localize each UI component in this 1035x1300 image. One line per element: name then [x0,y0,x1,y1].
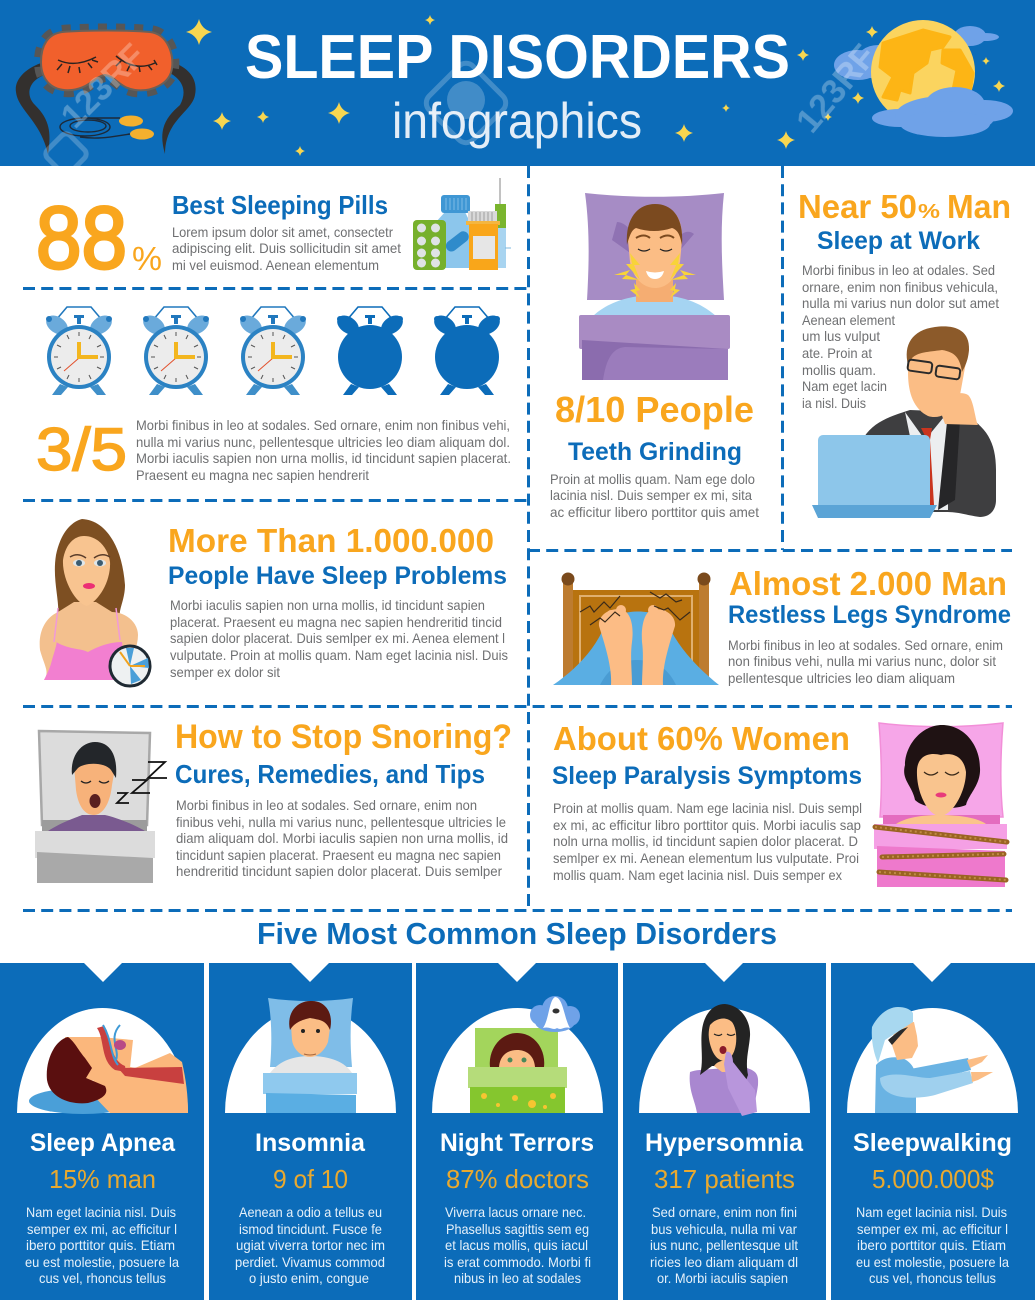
body text: Aenean a odio a tellus eu [239,1204,382,1220]
body text: ia nisl. Duis [802,395,866,411]
body text [802,262,999,411]
icon: alarm clocks [43,307,503,395]
body text: pellentesque ultricies leo diam aliquam [728,670,955,686]
body text: Proin at mollis quam. Nam ege lacinia nisl. Duis sempl [553,800,862,816]
icon: sleepwalker in nightcap [872,1007,993,1113]
body text [650,1204,798,1286]
body text: sapien dolor placerat. Duis semlper ex mi. Aenea element l [170,630,505,646]
body text: semper ex mi, ac efficitur l [27,1221,177,1237]
stat: 9 of 10 [273,1164,348,1194]
body text: hendreritid tincidunt sapien dolor placerat. Duis semlper [176,863,502,879]
body text: placerat. Praesent eu magna nec sapien hendreritid tincid [170,614,502,630]
body text [550,471,759,520]
panel: sleep apnea [0,963,204,1300]
panel: restless legs [553,565,1011,686]
body text: Morbi iaculis sapien non urna mollis, id tincidunt sapien [170,597,485,613]
name: Sleep Apnea [30,1129,176,1157]
body text: tincidunt sapien placerat. Praesent eu magna nec sapien [176,847,501,863]
body text [235,1204,385,1286]
heading: Man [947,188,1011,225]
body text: Nam eget lacinia nisl. Duis [26,1204,176,1220]
subtitle: infographics [392,93,642,149]
body text: um lus vulput [802,328,880,344]
name: Sleepwalking [853,1129,1012,1157]
panel: hypersomnia [623,963,826,1300]
subheading: Sleep Paralysis Symptoms [552,762,862,790]
heading: More Than 1.000.000 [168,522,494,559]
subheading: Cures, Remedies, and Tips [175,759,485,789]
body text: diam aliquam dol. Morbi iaculis sapien non urna mollis, id [176,830,508,846]
stat: 3/5: 3/5 [36,416,127,483]
body text: Morbi finibus in leo at sodales. Sed ornare, enim [728,637,1003,653]
body text: Nam eget lacin [802,378,887,394]
subheading: Restless Legs Syndrome [728,601,1011,629]
icon: scared child with ghost dream [468,996,580,1113]
stat: 88 percent: % [132,240,162,277]
stat: 15% man [49,1164,156,1194]
body text: Aenean element [802,312,895,328]
body text: nulla mi varius nunc, pellentesque ultricies leo diam aliquam dol. [136,434,510,450]
body text: Praesent eu magna nec sapien hendrerit [136,467,369,483]
icon: yawning woman [690,1004,758,1116]
body text: Nam eget lacinia nisl. Duis [856,1204,1007,1220]
body text: is erat commodo. Morbi fi [444,1254,591,1270]
text: 123RF [431,1177,530,1276]
icon: pill bottles and syringe [413,178,511,270]
panel: insomnia [209,963,412,1300]
body text: ate. Proin at [802,345,872,361]
icon: moon behind clouds [834,20,1013,137]
text: 123RF [789,38,884,140]
panel: 3 of 5 alarm clocks [36,307,511,483]
body text [176,797,508,879]
body text: Morbi finibus in leo at sodales. Sed ornare, enim non [176,797,477,813]
text: 123RF [54,37,153,136]
body text: Morbi finibus in leo at odales. Sed [802,262,995,278]
body text: Lorem ipsum dolor sit amet, consectetr [172,224,393,240]
body text: mollis quam. [802,362,876,378]
body text: Morbi iaculis sapien non urna mollis, id tincidunt sapien placerat. [136,450,511,466]
heading: % [918,201,940,223]
body text: cus vel, rhoncus tellus [39,1270,166,1286]
panel: sleep at work [798,188,1011,518]
stat: 87% doctors [446,1164,589,1194]
name: Insomnia [255,1129,366,1157]
body text [170,597,508,680]
subheading: Teeth Grinding [568,438,742,466]
body text: Morbi finibus in leo at sodales. Sed ornare, enim non finibus vehi, [136,417,510,433]
body text: eu est molestie, posuere la [856,1254,1009,1270]
name: Hypersomnia [645,1129,804,1157]
body text: Proin at mollis quam. Nam ege dolo [550,471,755,487]
heading: About 60% Women [553,720,850,757]
body text [553,800,862,883]
body text [444,1204,591,1286]
body text: finibus vehi, nulla mi varius nunc, pellentesque ultricies le [176,814,506,830]
stat: 88 percent: 88 [36,188,127,287]
stars [186,15,1005,156]
body text: et lacus mollis, quis iacul [445,1237,588,1253]
panel: sleepwalking [831,963,1035,1300]
icon: sleep mask with ear plugs [16,30,196,154]
panel: snoring [35,718,512,883]
heading: Almost 2.000 Man [729,565,1007,602]
icon: man awake in bed [263,998,357,1113]
body text: semlper ex mi. Aenean elementum lus vulputate. Proi [553,850,859,866]
stat: 317 patients [654,1164,795,1194]
body text: ex mi, ac efficitur libro porttitor quis. Morbi iaculis sap [553,817,861,833]
body text [25,1204,179,1286]
icon: snoring man in bed [35,731,167,883]
body text: semper ex mi, ac efficitur l [857,1221,1008,1237]
body text: ac efficitur libero porttitor quis amet [550,504,759,520]
subheading: Sleep at Work [817,227,980,255]
panel: teeth grinding [550,193,759,520]
panel dividers: dashed lines [23,166,1012,910]
icon: apnea airway profile [29,1025,188,1114]
heading: How to Stop Snoring? [175,718,512,756]
heading [798,188,1011,225]
icon: tired woman with clock [40,519,150,686]
icon: woman tied to bed with rope [874,723,1007,887]
icon: businessman asleep at laptop [812,326,996,518]
body text: mi vel euismod. Aenean elementum [172,257,379,273]
body text: ius nunc, pellentesque ult [650,1237,798,1253]
body text: ornare, enim non finibus vehicula, [802,279,998,295]
section heading: Five Most Common Sleep Disorders [257,916,777,951]
header banner [0,0,1035,166]
heading: Best Sleeping Pills [172,190,388,220]
panel: night terrors [416,963,618,1300]
icon: feet on bed [553,572,719,685]
body text: adipiscing elit. Duis sollicitudin sit amet [172,240,401,256]
name: Night Terrors [440,1129,594,1157]
panel: sleep problems [40,519,508,686]
body text: nibus in leo at sodales [454,1270,581,1286]
body text: ugiat viverra tortor nec im [236,1237,385,1253]
body text: noln urna mollis, id tincidunt sapien dolor placerat. D [553,833,858,849]
body text: ismod tincidunt. Fusce fe [239,1221,382,1237]
stat: 5.000.000$ [872,1164,994,1194]
body text: Sed ornare, enim non fini [652,1204,797,1220]
body text: perdiet. Vivamus commod [235,1254,385,1270]
body text: bus vehicula, nulla mi var [651,1221,797,1237]
body text: eu est molestie, posuere la [25,1254,179,1270]
body text: lacinia nisl. Duis semper ex mi, sita [550,487,752,503]
body text: nulla mi varius nun dolor sut amet [802,295,999,311]
body text: non finibus vehi, nulla mi varius nunc, dolor sit [728,653,996,669]
body text: or. Morbi iaculis sapien [657,1270,788,1286]
body text: Phasellus sagittis sem eg [446,1221,589,1237]
body text: semper ex dolor sit [170,664,280,680]
heading: Near 50 [798,188,917,225]
body text: ibero porttitor quis. Etiam [26,1237,175,1253]
panel: best sleeping pills [36,178,511,287]
body text: ibero porttitor quis. Etiam [857,1237,1006,1253]
icon: man grinding teeth [579,193,730,380]
subheading: People Have Sleep Problems [168,562,507,590]
body text [856,1204,1009,1286]
body text [136,417,511,483]
body text: ricies leo diam aliquam dl [650,1254,798,1270]
body text: mollis quam. Nam eget lacinia nisl. Duis semper ex [553,867,842,883]
heading: 8/10 People [555,389,754,430]
body text: o justo enim, congue [249,1270,369,1286]
body text: Viverra lacus ornare nec. [445,1204,586,1220]
body text [172,224,401,273]
title: SLEEP DISORDERS [245,23,790,92]
panel: sleep paralysis [552,720,1007,887]
body text: vulputate. Proin at mollis quam. Nam eget lacinia nisl. Duis [170,647,508,663]
body text: cus vel, rhoncus tellus [869,1270,996,1286]
body text [728,637,1003,686]
